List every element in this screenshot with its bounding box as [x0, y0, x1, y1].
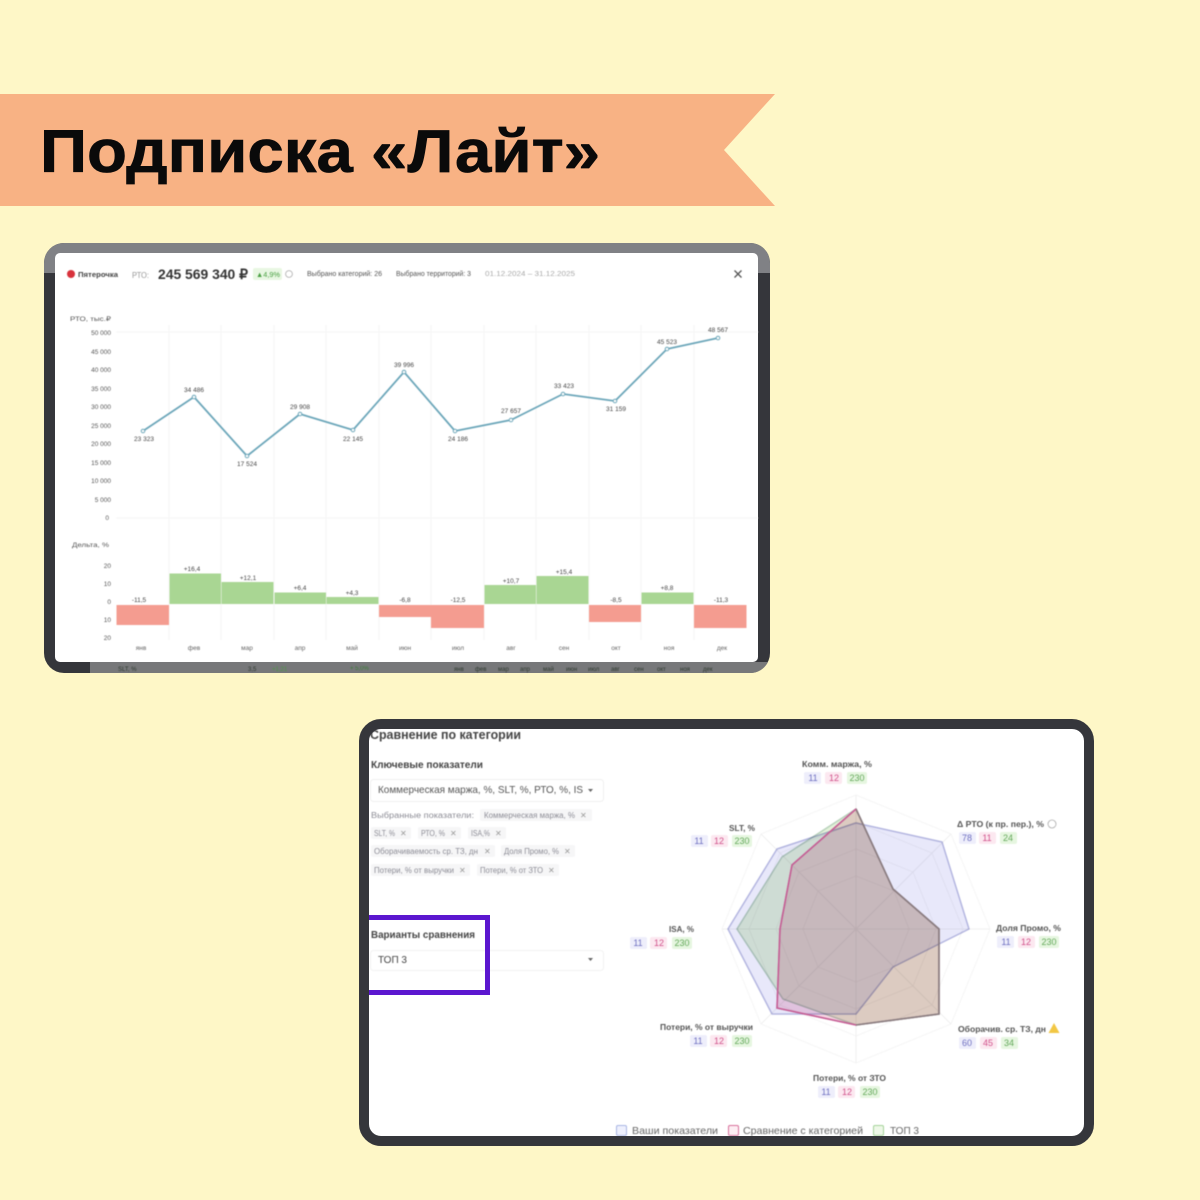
banner ribbon with title [0, 94, 775, 206]
selected metric chips: РТО, % [421, 829, 445, 838]
month labels: мар [241, 645, 253, 652]
selected metric chips: ✕ [564, 847, 571, 856]
blurred row under the modal [118, 666, 713, 673]
bar labels: +4,3 [346, 590, 359, 597]
y axis: 50 000 [91, 330, 111, 337]
modal header: РТО: [132, 271, 149, 280]
y axis: 15 000 [91, 460, 111, 467]
blurred row under the modal: дек [703, 667, 713, 673]
y axis: 0 [105, 515, 109, 522]
axis: turnover: 45 [983, 1038, 993, 1048]
axis: SLT: 12 [714, 836, 724, 846]
blurred row under the modal: + 5,0% [350, 666, 370, 672]
growth chip [253, 268, 282, 280]
data labels [134, 327, 728, 468]
selected metric chips: ISA,% [471, 829, 490, 838]
axis: losses of ZTO: 230 [862, 1087, 878, 1097]
axis: turnover: 34 [1004, 1038, 1014, 1048]
selected metric chips: ✕ [548, 866, 555, 875]
comparison controls: Варианты сравнения [371, 930, 475, 941]
axis: ISA: 12 [654, 938, 664, 948]
bar labels: -11,5 [132, 597, 147, 604]
axis: revenue delta [957, 819, 1056, 844]
month labels: янв [136, 645, 147, 652]
radar web [722, 795, 990, 1063]
axis: promo share: 12 [1021, 937, 1031, 947]
axis: commercial margin [802, 759, 872, 784]
bar labels: +10,7 [503, 578, 520, 585]
axis: losses of ZTO: 12 [842, 1087, 852, 1097]
axis: SLT: 11 [694, 836, 704, 846]
darker shared edge [856, 809, 939, 1025]
legend: Ваши показатели [632, 1125, 718, 1137]
data labels: 39 996 [394, 362, 414, 369]
line chart: revenue by month [70, 315, 758, 640]
month labels: сен [559, 645, 570, 652]
selected metric chips: Потери, % от ЗТО [480, 866, 543, 875]
metrics dropdown: Коммерческая маржа, %, SLT, %, РТО, %, IS [378, 784, 583, 796]
modal header: Выбрано категорий: 26 [307, 270, 382, 278]
highlight box [369, 918, 488, 992]
modal header [67, 266, 742, 282]
y axis: РТО, тыс.₽ [70, 315, 112, 323]
axis: turnover [958, 1023, 1060, 1049]
axis: revenue delta: Δ РТО (к пр. пер.), % [957, 819, 1044, 829]
data labels: 24 186 [448, 436, 468, 443]
icon: warning [1048, 1023, 1060, 1033]
blurred row under the modal: ноя [680, 667, 690, 673]
data labels: 27 657 [501, 408, 521, 415]
comparison dropdown: ТОП 3 [378, 954, 407, 966]
axis: promo share: 230 [1041, 937, 1057, 947]
axis: ISA: 230 [674, 938, 690, 948]
y axis [70, 315, 112, 522]
delta axis: 20 [104, 563, 111, 570]
icon: close [734, 270, 742, 278]
heading: Сравнение по категории [370, 727, 521, 742]
legend [616, 1125, 919, 1137]
blurred row under the modal: май [543, 666, 554, 673]
data labels: 29 908 [290, 404, 310, 411]
axis: losses of revenue: 12 [714, 1036, 724, 1046]
panel: tablet with category comparison [364, 724, 1089, 1141]
delta axis: 10 [104, 617, 111, 624]
bar labels: -6,8 [399, 597, 411, 604]
comparison controls [370, 727, 604, 970]
bar chart: delta percent by month [72, 542, 746, 652]
blurred row under the modal: 3,5 [248, 667, 257, 673]
data labels: 33 423 [554, 383, 574, 390]
axis labels and value chips [630, 759, 1061, 1098]
radar chart [630, 759, 1061, 1098]
blurred row under the modal: сен [634, 667, 644, 673]
axis: ISA: ISA, % [669, 924, 694, 934]
legend: ТОП 3 [890, 1125, 919, 1137]
axis: revenue delta: 11 [982, 833, 992, 843]
axis: promo share: Доля Промо, % [996, 923, 1061, 933]
axis: commercial margin: 230 [849, 773, 865, 783]
selected metric chips: SLT, % [374, 829, 395, 838]
title: Подписка «Лайт» [40, 118, 600, 185]
y axis: 35 000 [91, 386, 111, 393]
axis: losses of ZTO [813, 1073, 886, 1098]
selected metric chips: Доля Промо, % [504, 847, 559, 856]
legend: Сравнение с категорией [743, 1125, 863, 1137]
positive bars [170, 574, 694, 604]
month labels: фев [188, 645, 201, 652]
modal header: Пятерочка [78, 270, 119, 279]
blurred row under the modal: янв [454, 667, 464, 673]
series: category [777, 809, 939, 1025]
series: top 3 [737, 809, 939, 1025]
axis: ISA: 11 [633, 938, 643, 948]
axis: revenue delta: 78 [962, 833, 972, 843]
y axis: 30 000 [91, 404, 111, 411]
selected metric chips: Выбранные показатели: [371, 811, 474, 820]
delta axis: 20 [104, 635, 111, 642]
bar labels: -12,5 [451, 597, 466, 604]
y axis: 5 000 [95, 497, 111, 504]
selected metric chips: Оборачиваемость ср. ТЗ, дн [374, 847, 478, 856]
panel: tablet with revenue line chart and delta bars [44, 243, 770, 673]
blurred row under the modal: окт [657, 667, 666, 673]
bar labels: +12,1 [240, 575, 257, 582]
delta axis: 0 [107, 599, 111, 606]
blurred row under the modal: июл [588, 667, 600, 673]
data labels: 34 486 [184, 387, 204, 394]
blurred row under the modal: апр [520, 667, 531, 673]
selected metric chips: ✕ [450, 829, 457, 838]
comparison dropdown [370, 950, 604, 970]
axis: SLT [691, 823, 755, 847]
month labels: ноя [664, 645, 675, 652]
blurred row under the modal: SLT, % [118, 667, 137, 673]
modal header: 245 569 340 ₽ [158, 266, 248, 282]
selected metric chips: ✕ [459, 866, 466, 875]
axis: turnover: 60 [962, 1038, 972, 1048]
selected metric chips: ✕ [580, 811, 587, 820]
axis: losses of revenue: 230 [734, 1036, 750, 1046]
metrics dropdown [370, 780, 604, 802]
data labels: 31 159 [606, 406, 626, 413]
axis: SLT: SLT, % [729, 823, 755, 833]
bar chart: delta percent by month: Дельта, % [72, 542, 109, 549]
selected metric chips: Потери, % от выручки [374, 866, 454, 875]
blurred row under the modal: фев [475, 667, 486, 673]
month labels: окт [611, 645, 621, 652]
axis: commercial margin: Комм. маржа, % [802, 759, 872, 769]
blurred row under the modal: мар [498, 667, 509, 673]
data labels: 45 523 [657, 339, 677, 346]
month labels: июл [452, 645, 464, 652]
bar labels: +8,8 [661, 585, 674, 592]
blurred row under the modal: июн [566, 667, 577, 673]
y axis: 40 000 [91, 367, 111, 374]
axis: promo share [996, 923, 1061, 948]
month labels [136, 644, 727, 652]
bar labels: +16,4 [184, 566, 201, 573]
blurred row under the modal: +1,21 [272, 667, 288, 673]
negative bars [116, 605, 746, 628]
selected metric chips: ✕ [484, 847, 491, 856]
axis: commercial margin: 11 [808, 773, 818, 783]
tablet frame [364, 724, 1089, 1141]
delta axis [104, 563, 111, 642]
bar labels: +6,4 [294, 585, 307, 592]
y axis: 10 000 [91, 478, 111, 485]
bar labels [132, 566, 729, 604]
axis: turnover: Оборачив. ср. ТЗ, дн [958, 1024, 1046, 1034]
axis: losses of revenue [660, 1022, 753, 1047]
month labels: авг [506, 645, 516, 652]
series: your metrics [728, 823, 969, 1014]
axis: losses of revenue: Потери, % от выручки [660, 1022, 753, 1032]
data labels: 48 567 [708, 327, 728, 334]
bar labels: -8,5 [610, 597, 622, 604]
growth chip: ▲4,9% [256, 270, 280, 279]
axis: SLT: 230 [734, 836, 750, 846]
axis: losses of ZTO: Потери, % от ЗТО [813, 1073, 886, 1083]
month labels: июн [399, 645, 411, 652]
axis: revenue delta: 24 [1003, 833, 1013, 843]
selected metric chips: Коммерческая маржа, % [484, 811, 575, 820]
modal header: Выбрано территорий: 3 [396, 270, 471, 278]
icon: brand logo [67, 270, 75, 278]
modal header: 01.12.2024 – 31.12.2025 [485, 269, 575, 278]
axis: promo share: 11 [1001, 937, 1011, 947]
axis: commercial margin: 12 [829, 773, 839, 783]
axis: losses of revenue: 11 [693, 1036, 703, 1046]
data labels: 17 524 [237, 461, 257, 468]
bar labels: +15,4 [556, 569, 573, 576]
data labels: 23 323 [134, 436, 154, 443]
y axis: 45 000 [91, 349, 111, 356]
y axis: 20 000 [91, 441, 111, 448]
revenue line [143, 338, 718, 456]
month labels: май [346, 644, 358, 652]
data labels: 22 145 [343, 436, 363, 443]
selected metric chips [371, 809, 592, 876]
selected metric chips: ✕ [400, 829, 407, 838]
axis: ISA [630, 924, 694, 949]
blurred row under the modal: авг [611, 667, 621, 673]
selected metric chips: ✕ [495, 829, 502, 838]
axis: losses of ZTO: 11 [821, 1087, 831, 1097]
month labels: дек [717, 645, 727, 652]
month labels: апр [295, 645, 306, 652]
bar labels: -11,3 [714, 597, 729, 604]
comparison controls: Ключевые показатели [371, 760, 483, 771]
tablet body [44, 243, 770, 673]
y axis: 25 000 [91, 423, 111, 430]
delta axis: 10 [104, 581, 111, 588]
